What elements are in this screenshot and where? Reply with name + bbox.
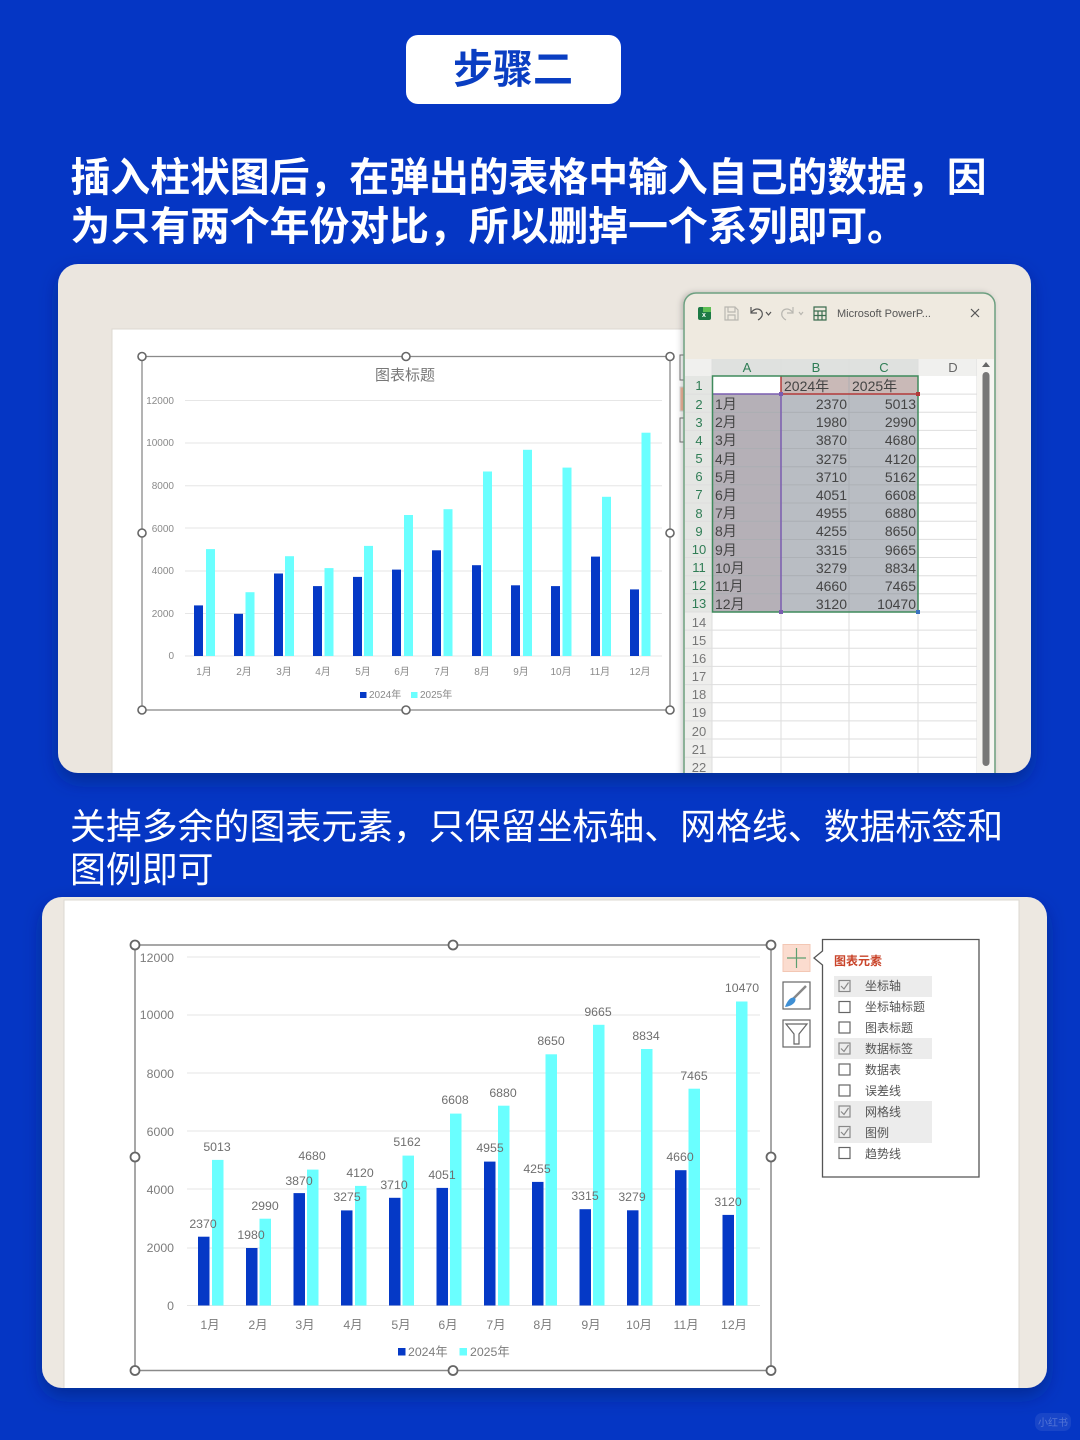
- chart: final column chart: 9月: [581, 1318, 601, 1332]
- table data: 5162: [885, 469, 916, 485]
- menu options: 网格线: [865, 1104, 901, 1119]
- chart: final column chart: 5月: [391, 1318, 411, 1332]
- chart: final column chart: 8月: [533, 1318, 553, 1332]
- column headers: A: [743, 360, 752, 375]
- chart: draft column chart: 2月: [236, 666, 252, 678]
- row numbers: 3: [695, 415, 703, 430]
- chart: draft column chart: 5月: [355, 666, 371, 678]
- menu options: 图例: [865, 1126, 889, 1140]
- step title pill: 步骤二: [453, 37, 573, 95]
- chart: final column chart: [140, 951, 760, 1359]
- chart: final column chart: 2000: [147, 1241, 174, 1255]
- icon: add element button: [783, 944, 810, 972]
- data labels: 7465: [680, 1069, 708, 1083]
- table data: 9月: [715, 542, 737, 558]
- icon: sheet: [814, 307, 826, 320]
- data labels: 3275: [333, 1190, 361, 1204]
- table data: 2370: [816, 396, 847, 412]
- chart: draft column chart: 1月: [196, 666, 212, 678]
- row numbers: 13: [692, 596, 706, 611]
- menu options: 坐标轴标题: [865, 999, 925, 1014]
- data labels: 4051: [428, 1168, 456, 1182]
- table data: 2990: [885, 414, 916, 430]
- data labels: 3710: [380, 1178, 408, 1192]
- chart: draft column chart: 6000: [152, 524, 174, 535]
- chart: final column chart: 12月: [721, 1318, 747, 1332]
- row numbers: 1: [695, 378, 703, 393]
- subheading: remove extra chart elements: 关掉多余的图表元素，只保留坐标轴、网格线、数据标签和: [70, 798, 1003, 850]
- chart selection frame: [130, 940, 776, 1375]
- data labels: 5013: [203, 1140, 231, 1154]
- row numbers: 19: [692, 705, 706, 720]
- column headers: B: [812, 360, 820, 375]
- table data: 4660: [816, 578, 847, 594]
- legend: [360, 689, 452, 699]
- icon: close: [971, 309, 979, 317]
- table data: 3120: [816, 596, 847, 612]
- table data: 1980: [816, 414, 847, 430]
- scrollbar: [977, 359, 994, 779]
- legend: 2024年: [408, 1345, 448, 1359]
- chart: draft column chart: 图表标题: [375, 367, 435, 384]
- heading: insert column chart instructions: 插入柱状图后，在弹出的表格中输入自己的数据，因: [70, 146, 987, 203]
- column headers: C: [879, 360, 889, 375]
- icon: Excel logo: x: [702, 312, 706, 319]
- data labels: 6608: [441, 1093, 469, 1107]
- chart: final column chart: 1月: [200, 1318, 220, 1332]
- legend: 2025年: [470, 1345, 510, 1359]
- chart: draft column chart: [146, 367, 662, 701]
- table data: 12月: [715, 596, 745, 612]
- row numbers: 21: [692, 742, 706, 757]
- table data: 7465: [885, 578, 916, 594]
- table data: 3315: [816, 542, 847, 558]
- side buttons behind sheet: [680, 354, 684, 442]
- watermark: 小红书: [1038, 1416, 1068, 1429]
- data labels: 3870: [285, 1174, 313, 1188]
- legend: 2024年: [369, 688, 401, 701]
- icon: Excel logo: [698, 307, 711, 320]
- slide page: [64, 900, 1019, 1395]
- table data: 4120: [885, 451, 916, 467]
- icon: save: [725, 307, 738, 320]
- table data: 7月: [715, 505, 737, 521]
- panel: final chart with chart elements menu: [42, 897, 1047, 1395]
- table data: 10月: [715, 560, 745, 576]
- table data: 3279: [816, 560, 847, 576]
- table data: 4255: [816, 523, 847, 539]
- data labels: 4955: [476, 1141, 504, 1155]
- data labels: 3120: [714, 1195, 742, 1209]
- chart selection frame: [138, 352, 674, 714]
- chart: draft column chart: 12000: [146, 396, 174, 407]
- menu options: 数据标签: [865, 1041, 913, 1056]
- menu options: 误差线: [865, 1084, 901, 1098]
- chart: final column chart: 3月: [295, 1318, 315, 1332]
- row numbers: 20: [692, 724, 706, 739]
- row numbers: 6: [695, 469, 703, 484]
- row numbers: 7: [695, 487, 703, 502]
- chart: final column chart: 8000: [147, 1067, 174, 1081]
- chart: draft column chart: 2000: [152, 609, 174, 620]
- row numbers: 12: [692, 578, 706, 593]
- data labels: 5162: [393, 1135, 421, 1149]
- table data: 2024年: [784, 378, 829, 394]
- data labels: 8834: [632, 1029, 660, 1043]
- table data: 3710: [816, 469, 847, 485]
- chart: final column chart: 7月: [486, 1318, 506, 1332]
- chart: final column chart: 12000: [140, 951, 174, 965]
- data labels: 4660: [666, 1150, 694, 1164]
- chart: draft column chart: 11月: [590, 666, 610, 678]
- selected data fills: [713, 376, 918, 612]
- chart: final column chart: 6000: [147, 1125, 174, 1139]
- row numbers: 10: [692, 542, 706, 557]
- heading: insert column chart instructions: [70, 146, 987, 252]
- table data: 2025年: [852, 378, 897, 394]
- table data: 6月: [715, 487, 737, 503]
- chart: draft column chart: 6月: [394, 666, 410, 678]
- Excel data window: [684, 293, 995, 790]
- chart: draft column chart: 10月: [550, 666, 572, 678]
- data labels: 4255: [523, 1162, 551, 1176]
- row numbers: 22: [692, 760, 706, 775]
- data labels: 6880: [489, 1086, 517, 1100]
- panel: PowerPoint chart with Excel data sheet: [58, 264, 1031, 790]
- table data: 8834: [885, 560, 916, 576]
- watermark: [1035, 1413, 1071, 1431]
- table data: 4月: [715, 451, 737, 467]
- chart: draft column chart: 12月: [629, 666, 651, 678]
- menu options: 坐标轴: [865, 978, 901, 993]
- row numbers: 11: [692, 560, 706, 575]
- chart: final column chart: 10月: [626, 1318, 652, 1332]
- table data: 1月: [715, 396, 737, 412]
- chart: draft column chart: 8000: [152, 481, 174, 492]
- row numbers: 17: [692, 669, 706, 684]
- data labels: 8650: [537, 1034, 565, 1048]
- icon: brush button: [783, 982, 810, 1009]
- chart: final column chart: 10000: [140, 1008, 174, 1022]
- chart: draft column chart: 7月: [434, 666, 450, 678]
- table data: [715, 378, 916, 612]
- worksheet grid: [685, 359, 977, 780]
- row numbers: 8: [695, 506, 703, 521]
- chart: final column chart: 2月: [248, 1318, 268, 1332]
- row numbers: 18: [692, 687, 706, 702]
- legend: 2025年: [420, 688, 452, 701]
- chart: final column chart: 6月: [438, 1318, 458, 1332]
- table data: 3870: [816, 432, 847, 448]
- chart elements menu: [814, 940, 979, 1177]
- chart: final column chart: 4000: [147, 1183, 174, 1197]
- data labels: [189, 981, 759, 1242]
- chart: draft column chart: 4月: [315, 666, 331, 678]
- data labels: 1980: [237, 1228, 265, 1242]
- data labels: 9665: [584, 1005, 612, 1019]
- row numbers: 16: [692, 651, 706, 666]
- menu options: 趋势线: [865, 1147, 901, 1161]
- subheading: remove extra chart elements: [70, 798, 1003, 893]
- heading: insert column chart instructions: 为只有两个年份对比，所以删掉一个系列即可。: [70, 195, 907, 252]
- data labels: 2990: [251, 1199, 279, 1213]
- chart: final column chart: 4月: [343, 1318, 363, 1332]
- step title pill: [406, 35, 621, 104]
- column headers: [742, 363, 957, 372]
- icon: redo: [782, 307, 803, 320]
- row numbers: 15: [692, 633, 706, 648]
- data labels: 2370: [189, 1217, 217, 1231]
- icon: filter button: [783, 1020, 810, 1047]
- table data: 3月: [715, 432, 737, 448]
- row numbers: 14: [692, 615, 706, 630]
- table data: 4680: [885, 432, 916, 448]
- chart: draft column chart: 0: [168, 651, 174, 662]
- table data: 8650: [885, 523, 916, 539]
- table data: 5月: [715, 469, 737, 485]
- chart: draft column chart: 3月: [276, 666, 292, 678]
- row numbers: 2: [695, 397, 703, 412]
- row numbers: 9: [695, 524, 703, 539]
- legend: [398, 1345, 510, 1358]
- chart: draft column chart: 9月: [513, 666, 529, 678]
- data labels: 10470: [725, 981, 759, 995]
- row numbers: [692, 378, 706, 775]
- column headers: D: [948, 360, 958, 375]
- chart: draft column chart: 4000: [152, 566, 174, 577]
- table data: 4955: [816, 505, 847, 521]
- menu options: 数据表: [865, 1062, 901, 1077]
- chart: final column chart: 0: [167, 1299, 174, 1313]
- data labels: 4680: [298, 1149, 326, 1163]
- table data: 6880: [885, 505, 916, 521]
- table data: 3275: [816, 451, 847, 467]
- selection borders: [712, 376, 920, 614]
- table data: 5013: [885, 396, 916, 412]
- menu options: 图表标题: [865, 1021, 913, 1035]
- menu heading: 图表元素: [834, 953, 882, 968]
- slide page: [112, 329, 692, 779]
- table data: 2月: [715, 414, 737, 430]
- table data: 6608: [885, 487, 916, 503]
- data labels: 3315: [571, 1189, 599, 1203]
- table data: 8月: [715, 523, 737, 539]
- highlighted rows: [834, 976, 932, 1143]
- row numbers: 4: [695, 433, 703, 448]
- data labels: 3279: [618, 1190, 646, 1204]
- row numbers: 5: [695, 451, 703, 466]
- chart: final column chart: 11月: [673, 1318, 699, 1332]
- window title: Microsoft PowerP...: [837, 308, 931, 320]
- data labels: 4120: [346, 1166, 374, 1180]
- table data: 11月: [715, 578, 744, 594]
- table data: 10470: [877, 596, 916, 612]
- menu options: [839, 978, 925, 1161]
- icon: undo: [751, 307, 771, 320]
- table data: 9665: [885, 542, 916, 558]
- subheading: remove extra chart elements: 图例即可: [70, 841, 214, 893]
- chart: draft column chart: 8月: [474, 666, 490, 678]
- table data: 4051: [816, 487, 847, 503]
- chart: draft column chart: 10000: [146, 438, 174, 449]
